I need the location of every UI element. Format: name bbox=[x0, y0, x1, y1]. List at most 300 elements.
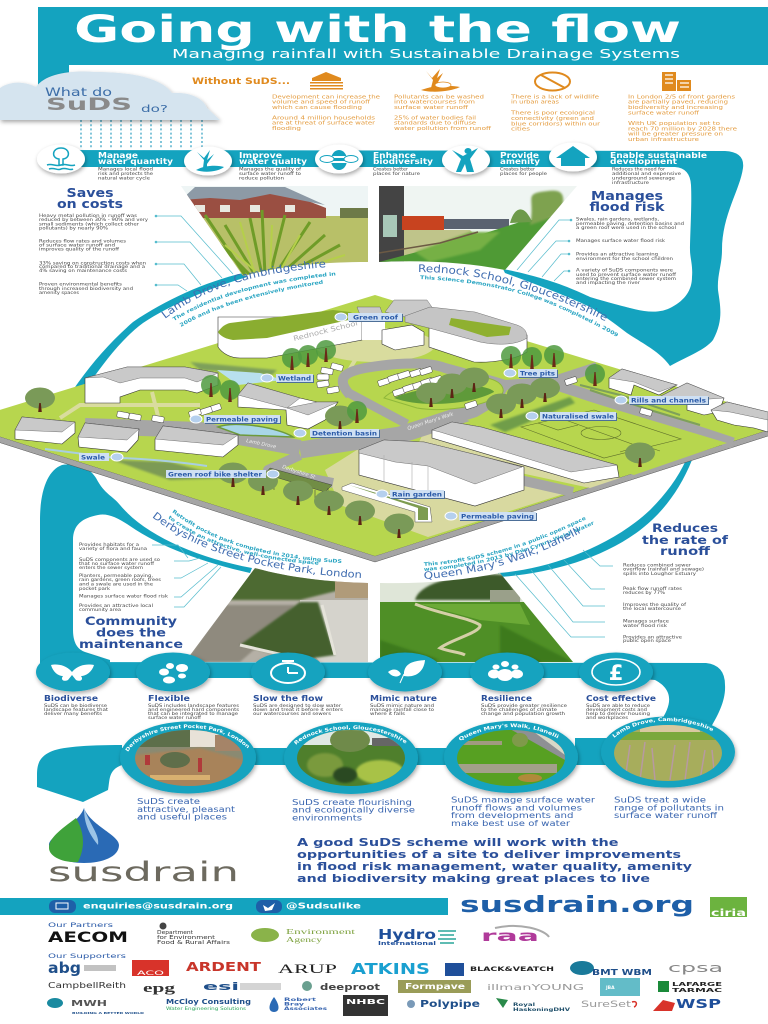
principle descriptions: SuDS mimic nature and bbox=[370, 703, 434, 709]
cloud: what do SuDS do: do? bbox=[141, 104, 168, 115]
caption 4 bbox=[614, 796, 724, 820]
orange column 3: There is poor ecological bbox=[510, 111, 595, 117]
orange column 3 bbox=[510, 94, 601, 132]
supporters row 2: esi bbox=[203, 980, 239, 993]
callout lines right top bbox=[517, 219, 572, 281]
trees bbox=[25, 340, 655, 538]
principle descriptions bbox=[44, 703, 650, 721]
principle descriptions: to the challenges of climate bbox=[481, 707, 557, 713]
closing statement bbox=[297, 837, 692, 885]
caption 4: SuDS treat a wide bbox=[614, 796, 706, 805]
ciria logo bbox=[710, 897, 747, 919]
arc title: Derbyshire Street: to create an attractive, well-connected space bbox=[168, 516, 318, 565]
principle descriptions: that can be integrated to manage bbox=[148, 711, 238, 717]
benefit labels: development bbox=[610, 157, 677, 166]
orange column 3: There is a lack of wildlife bbox=[510, 94, 599, 100]
benefit descriptions: reduce pollution bbox=[239, 176, 284, 182]
arc title: Lamb Drove: 2006 and has been extensively monitored bbox=[180, 280, 323, 327]
list: runoff: reduces by 77% bbox=[623, 590, 665, 596]
benefit descriptions: Creates better bbox=[500, 166, 535, 172]
site lawn bbox=[0, 295, 768, 556]
partners: Hydro bbox=[378, 928, 436, 943]
list: saves on costs: reduced by between 30% - 90% and very bbox=[39, 217, 148, 223]
list: saves on costs bbox=[39, 213, 148, 296]
supporters row 3: SureSet bbox=[581, 1000, 632, 1010]
list: community: that no surface water runoff bbox=[79, 561, 155, 567]
principle icon: droplets bbox=[136, 652, 210, 692]
road names: Lamb Drove bbox=[246, 438, 277, 450]
principle descriptions: SuDS can be biodiverse bbox=[44, 703, 107, 709]
caption 3: SuDS manage surface water bbox=[451, 796, 596, 805]
partners bbox=[48, 921, 549, 947]
orange column 3: in urban areas bbox=[511, 100, 559, 106]
photo: Derbyshire Street bbox=[185, 568, 368, 663]
principle icon: stopwatch bbox=[251, 652, 325, 692]
arc title: Queen Marys Walk: This retrofit SuDS scheme in a public open space bbox=[424, 517, 586, 566]
Rednock School right wing bbox=[405, 307, 527, 362]
list: community bbox=[79, 542, 169, 613]
list: saves on costs: Heavy metal pollution in runoff was bbox=[39, 213, 138, 219]
principle icon: leaf bbox=[368, 652, 442, 692]
circle photo: Derbyshire Street bbox=[118, 721, 260, 798]
susdrain logo drop and leaf bbox=[49, 808, 119, 863]
car park cars bbox=[117, 363, 653, 423]
rain garden planter bbox=[342, 483, 432, 522]
closing statement: in flood risk management, water quality, amenity bbox=[297, 861, 692, 873]
heading: reduces the rate of runoff: Reduces bbox=[652, 521, 718, 535]
lower teal band with arrow bbox=[37, 738, 620, 802]
list: community: community area bbox=[79, 607, 121, 613]
orange column 1: are at threat of surface water bbox=[272, 121, 376, 127]
principle descriptions: deliver many benefits bbox=[44, 711, 103, 717]
list: manages flood risk: and impacting the river bbox=[576, 280, 640, 286]
list: saves on costs: through increased biodiversity and bbox=[39, 286, 133, 292]
list: community: Planters, permeable paving, bbox=[79, 573, 153, 579]
caption 4: range of pollutants in bbox=[614, 803, 724, 812]
label: rain garden: Rain garden bbox=[392, 492, 442, 498]
caption 3: make best use of water bbox=[451, 819, 571, 828]
list: manages flood risk: Swales, rain gardens, wetlands, bbox=[576, 217, 659, 223]
icon: buildings bbox=[662, 72, 691, 91]
site base slab bbox=[0, 422, 768, 562]
callout lines bottom left bbox=[152, 545, 221, 607]
list: saves on costs: 4% saving on maintenance costs bbox=[39, 268, 128, 274]
list: runoff: overflow (rainfall and sewage) bbox=[623, 567, 704, 573]
list: runoff: water flood risk bbox=[623, 623, 668, 629]
label: green roof bike shelter: Green roof bike shelter bbox=[168, 472, 262, 478]
partners: for Environment bbox=[157, 935, 215, 941]
principle descriptions: manage rainfall close to bbox=[370, 707, 434, 713]
label: wetland bbox=[261, 374, 314, 383]
list: saves on costs: of surface water runoff and bbox=[39, 242, 115, 248]
paved plaza bbox=[325, 448, 570, 537]
icon: dead tree and fish bbox=[421, 69, 460, 92]
middle teal band with right tail bbox=[40, 662, 725, 727]
terrace forecourt bbox=[415, 430, 620, 488]
label: detention basin bbox=[294, 429, 380, 438]
cloud: what do SuDS do: SuDS bbox=[46, 95, 132, 115]
ciria logo: ciria bbox=[711, 908, 746, 919]
road network bbox=[85, 364, 733, 492]
caption 1: and useful places bbox=[137, 812, 227, 822]
supporters row 3: HaskoningDHV bbox=[513, 1007, 571, 1013]
supporters row 2: Formpave bbox=[405, 982, 465, 991]
principle descriptions: SuDS are designed to slow water bbox=[253, 703, 341, 709]
label: permeable paving lower bbox=[445, 512, 537, 521]
isometric site map bbox=[0, 295, 768, 562]
principle descriptions: SuDS provide greater resilience bbox=[481, 703, 567, 709]
list: saves on costs: small sediments (which collect other bbox=[39, 222, 139, 228]
circle photo: Derbyshire Street: Derbyshire Street Pocket Park, London bbox=[125, 724, 249, 752]
heading: community does the maintenance: does the bbox=[96, 626, 166, 640]
supporters row 2: epg bbox=[143, 980, 176, 995]
principle titles: Cost effective bbox=[586, 694, 657, 703]
principle icon: people bbox=[470, 652, 544, 692]
circle photo: Rednock School bbox=[282, 722, 422, 798]
supporters row 1: ACO bbox=[137, 970, 165, 977]
beige footpaths bbox=[60, 352, 360, 418]
label: rills and channels: Rills and channels bbox=[631, 398, 707, 404]
orange column 4: With UK population set to bbox=[628, 121, 720, 127]
partners: Department bbox=[157, 930, 193, 936]
supporters row 2: deeproot bbox=[320, 983, 381, 993]
heading: reduces the rate of runoff bbox=[642, 521, 729, 558]
orange column 4: will be greater pressure on bbox=[628, 132, 723, 138]
list: community: Manages surface water flood risk bbox=[79, 594, 169, 600]
benefit icon: provide amenity bbox=[442, 146, 490, 174]
callout lines bottom right bbox=[515, 550, 613, 637]
label: green roof bbox=[335, 313, 403, 322]
orange column 4 bbox=[628, 94, 737, 143]
large central block bbox=[359, 440, 524, 506]
label: permeable paving lower: Permeable paving bbox=[461, 514, 534, 520]
benefit labels bbox=[98, 151, 708, 166]
principle titles: Resilience bbox=[481, 694, 533, 703]
heading: manages flood risk: flood risk bbox=[590, 200, 666, 214]
arc title: Derbyshire Street: Derbyshire Street Pocket Park, London bbox=[152, 512, 361, 578]
tree island bbox=[384, 378, 503, 409]
school name: Rednock School bbox=[293, 319, 359, 343]
caption 3: runoff flows and volumes bbox=[451, 803, 582, 812]
supporters row 2: TARMAC bbox=[672, 988, 722, 994]
list: saves on costs: amenity spaces bbox=[39, 290, 80, 296]
heading: reduces the rate of runoff: runoff bbox=[660, 544, 711, 558]
list: runoff: Improves the quality of bbox=[623, 602, 687, 608]
list: manages flood risk: entering the combined sewer system bbox=[576, 276, 676, 282]
partners: Food & Rural Affairs bbox=[157, 940, 231, 946]
long block upper left bbox=[85, 367, 218, 403]
Rednock School left wing bbox=[218, 310, 362, 358]
principle descriptions: development costs and bbox=[586, 707, 647, 713]
list: runoff: Provides an attractive bbox=[623, 634, 682, 640]
caption 1: SuDS create bbox=[137, 797, 200, 806]
list: community: rain gardens, green roofs, trees bbox=[79, 577, 162, 583]
benefit descriptions: surface water runoff to bbox=[239, 171, 301, 177]
heading: saves on costs bbox=[57, 186, 123, 211]
label: wetland: Wetland bbox=[278, 376, 311, 382]
orange column 4: reach 70 million by 2028 there bbox=[628, 126, 737, 132]
partners: Our Partners bbox=[48, 921, 114, 929]
supporters row 1: ATKINS bbox=[351, 960, 430, 978]
list: community: Provides an attractive local bbox=[79, 603, 153, 609]
orange column 2: standards due to diffuse bbox=[394, 121, 476, 127]
supporters row 1 bbox=[48, 952, 723, 978]
label: green roof bike shelter bbox=[166, 470, 279, 478]
circle photo: Lamb Drove bbox=[600, 716, 738, 792]
principle titles: Flexible bbox=[148, 694, 191, 703]
partners: AECOM bbox=[48, 930, 128, 946]
heading: saves on costs: Saves bbox=[66, 186, 114, 200]
benefit descriptions: risk and protects the bbox=[98, 171, 153, 177]
supporters row 1: Our Supporters bbox=[48, 952, 127, 960]
benefit labels: water quantity bbox=[98, 157, 174, 166]
principle titles bbox=[44, 694, 657, 703]
orange column 4: urban infrastructure bbox=[628, 137, 699, 143]
benefit labels: water quality bbox=[239, 157, 308, 166]
principle descriptions: down and treat it before it enters bbox=[253, 707, 344, 713]
supporters row 3: MWH bbox=[71, 999, 107, 1008]
website: susdrain.org bbox=[460, 893, 694, 918]
list: runoff: Peak flow runoff rates bbox=[623, 586, 683, 592]
detention basin bbox=[218, 424, 293, 437]
supporters row 2: CampbellReith bbox=[48, 981, 126, 990]
principle icon: pound: £ bbox=[609, 661, 623, 685]
arc title: Derbyshire Street: Retrofit pocket park completed in 2014, using SuDS bbox=[172, 509, 342, 563]
orange column 4: are partially paved, reducing bbox=[628, 100, 728, 106]
caption 2 bbox=[292, 798, 415, 823]
list: manages flood risk: permeable paving, detention basins and bbox=[576, 221, 684, 227]
icon: no wildlife bbox=[535, 72, 570, 90]
orange column 3: connectivity (green and bbox=[511, 116, 594, 122]
closing statement: opportunities of a site to deliver improvements bbox=[297, 849, 681, 861]
benefit descriptions: natural water cycle bbox=[98, 176, 150, 182]
rills bbox=[580, 385, 700, 425]
supporters row 1: BMT WBM bbox=[592, 968, 652, 977]
caption 2: environments bbox=[292, 814, 362, 823]
bottom right arc bbox=[498, 460, 692, 577]
road names: Derbyshire St bbox=[281, 464, 317, 481]
list: community: pocket park bbox=[79, 586, 111, 592]
supporters row 1: abg bbox=[48, 959, 81, 977]
caption 4: surface water runoff bbox=[614, 811, 718, 820]
orange column 1: flooding bbox=[272, 126, 301, 132]
contact bar: enquiries@susdrain.org bbox=[83, 902, 233, 910]
label: permeable paving bbox=[190, 415, 281, 424]
orange column 2: Pollutants can be washed bbox=[394, 94, 484, 100]
supporters row 2: illmanYOUNG bbox=[487, 983, 584, 992]
supporters row 3: Associates bbox=[284, 1006, 328, 1012]
arc title: Queen Marys Walk: Queen Mary's Walk, Llanelli bbox=[424, 526, 580, 580]
list: saves on costs: 33% saving on construction costs when bbox=[39, 260, 146, 266]
orange column 2: water pollution from runoff bbox=[394, 126, 492, 132]
label: swale: Swale bbox=[81, 454, 105, 462]
list: saves on costs: pollutants) by nearly 90% bbox=[39, 226, 108, 232]
supporters row 3: McCloy Consulting bbox=[166, 998, 251, 1006]
principle descriptions: help to deliver housing bbox=[586, 711, 650, 717]
orange column 2: 25% of water bodies fail bbox=[394, 115, 476, 121]
arc title: Rednock School: Rednock School, Gloucestershire bbox=[419, 264, 607, 321]
orange column 1: Around 4 million households bbox=[272, 115, 375, 121]
cloud: what do SuDS do bbox=[0, 72, 220, 120]
principle descriptions: SuDS are able to reduce bbox=[586, 703, 650, 709]
football pitch bbox=[467, 392, 727, 475]
photo: Rednock School bbox=[379, 186, 577, 276]
principle descriptions: change and population growth bbox=[481, 711, 565, 717]
benefit labels: Provide bbox=[500, 151, 540, 160]
cloud: what do SuDS do: What do bbox=[45, 85, 112, 99]
list: runoff: the local watercourse bbox=[623, 606, 681, 612]
principle descriptions: landscape features that bbox=[44, 707, 108, 713]
supporters row 3: Robert bbox=[284, 997, 318, 1003]
list: saves on costs: improves quality of the runoff bbox=[39, 246, 120, 252]
benefit labels: Enable sustainable bbox=[610, 151, 708, 160]
orange column 4: In London 2/5 of front gardens bbox=[628, 94, 735, 100]
supporters row 3: NHBC bbox=[346, 998, 385, 1006]
benefit icon: sustainable development house bbox=[549, 142, 597, 172]
supporters row 2: LAFARGE bbox=[672, 982, 722, 988]
subtitle: Managing rainfall with Sustainable Drainage Systems bbox=[172, 46, 680, 61]
benefit descriptions: Manages the quality of bbox=[239, 166, 302, 172]
list: community: variety of flora and fauna bbox=[79, 546, 147, 552]
road names: Queen Mary's Walk bbox=[407, 411, 455, 432]
list: community: and a swale are used in the bbox=[79, 582, 153, 588]
benefit labels: amenity bbox=[500, 157, 541, 166]
list: runoff: Manages surface bbox=[623, 619, 669, 625]
list: manages flood risk: Manages surface water flood risk bbox=[576, 238, 666, 244]
road names bbox=[246, 411, 455, 481]
label: rain garden bbox=[376, 490, 445, 499]
list: manages flood risk: environment for the school children bbox=[576, 256, 673, 262]
label: swale bbox=[79, 453, 123, 462]
rain dashes bbox=[81, 120, 202, 148]
top left arc bbox=[73, 273, 247, 390]
contact bar bbox=[0, 898, 448, 915]
label: detention basin: Detention basin bbox=[312, 430, 377, 438]
principle titles: Biodiverse bbox=[44, 694, 99, 703]
Rednock School central blocks bbox=[357, 300, 436, 350]
contact bar: @Sudsulike bbox=[286, 902, 361, 910]
benefit descriptions: underground sewerage bbox=[612, 176, 675, 182]
principle descriptions: our watercourses and sewers bbox=[253, 711, 332, 717]
school courtyard bbox=[315, 328, 435, 362]
benefit descriptions: Reduces the need for bbox=[612, 166, 665, 172]
supporters row 3 bbox=[47, 995, 721, 1016]
caption 3 bbox=[451, 796, 596, 828]
heading: community does the maintenance bbox=[79, 614, 183, 651]
label: tree pits bbox=[504, 369, 558, 378]
orange column 2: into watercourses from bbox=[394, 100, 475, 106]
principle descriptions: surface water runoff bbox=[148, 715, 202, 721]
heading: reduces the rate of runoff: the rate of bbox=[642, 533, 729, 547]
caption 2: SuDS create flourishing bbox=[292, 798, 412, 807]
orange column 2: surface water runoff bbox=[394, 105, 469, 111]
swale bbox=[45, 449, 230, 480]
benefit descriptions: infrastructure bbox=[612, 180, 649, 186]
apartment block bbox=[238, 383, 338, 429]
benefit labels: Manage bbox=[98, 151, 139, 160]
supporters row 1: ARDENT bbox=[186, 960, 262, 974]
label: rills and channels bbox=[615, 396, 709, 405]
list: manages flood risk: used to prevent surface water runoff bbox=[576, 272, 677, 278]
principle titles: Slow the flow bbox=[253, 694, 324, 703]
benefit icon: improve water quality bbox=[184, 146, 232, 176]
wetland pond and reeds bbox=[190, 362, 283, 385]
orange column 3: blue corridors) within our bbox=[511, 121, 601, 127]
supporters row 1: ARUP bbox=[278, 961, 337, 976]
bottom left crescent bbox=[40, 464, 252, 668]
label: naturalised swale: Naturalised swale bbox=[542, 414, 614, 420]
caption 2: and ecologically diverse bbox=[292, 806, 415, 815]
caption 3: from developments and bbox=[451, 811, 574, 820]
list: manages flood risk: A variety of SuDS components were bbox=[576, 268, 673, 274]
supporters row 2 bbox=[48, 978, 722, 996]
orange column 1: which can cause flooding bbox=[272, 105, 362, 111]
list: manages flood risk bbox=[576, 217, 684, 286]
benefit descriptions: places for nature bbox=[373, 171, 420, 177]
list: manages flood risk: Provides an attractive learning bbox=[576, 252, 658, 258]
partners: International bbox=[378, 941, 436, 947]
label: naturalised swale bbox=[526, 412, 617, 421]
benefit descriptions: Creates better bbox=[373, 166, 408, 172]
orange column 1: Development can increase the bbox=[272, 94, 380, 100]
benefit labels: Improve bbox=[239, 151, 283, 160]
benefit descriptions bbox=[98, 166, 681, 186]
right terrace bbox=[432, 422, 619, 483]
teal swoosh top band and right tail bbox=[45, 150, 743, 366]
list: runoff: Reduces combined sewer bbox=[623, 563, 691, 569]
list: runoff: public open space bbox=[623, 638, 671, 644]
partners: raa bbox=[481, 927, 539, 945]
list: saves on costs: Reduces flow rates and volumes bbox=[39, 238, 127, 244]
principle descriptions: SuDS includes landscape features bbox=[148, 703, 240, 709]
caption 1: attractive, pleasant bbox=[137, 805, 235, 814]
list: manages flood risk: a green roof were used in the school bbox=[576, 225, 676, 231]
right houses bbox=[609, 369, 768, 432]
list: community: enters the sewer system bbox=[79, 565, 143, 571]
arc title: Rednock School: This Science Demonstrator College was completed in 2009 bbox=[420, 275, 618, 336]
principle descriptions: where it falls bbox=[370, 711, 406, 717]
list: community: SuDS components are used so bbox=[79, 557, 160, 563]
label: permeable paving: Permeable paving bbox=[206, 416, 278, 424]
icon: flooded house bbox=[310, 72, 343, 90]
closing statement: A good SuDS scheme will work with the bbox=[297, 837, 618, 849]
supporters row 1: cpsa bbox=[668, 961, 723, 975]
supporters row 3: Bray bbox=[284, 1002, 304, 1008]
without SuDS heading: Without SuDS... bbox=[192, 77, 290, 87]
photo: Lamb Drove bbox=[181, 186, 368, 276]
heading: saves on costs: on costs bbox=[57, 197, 123, 211]
callout lines left top bbox=[155, 215, 233, 291]
photo: Queen Marys Walk bbox=[380, 573, 573, 664]
circle photo: Queen Marys Walk bbox=[442, 720, 582, 798]
supporters row 1: BLACK&VEATCH bbox=[470, 965, 554, 973]
principle icon: pound bbox=[579, 652, 653, 692]
green roof bike shelter bbox=[265, 468, 332, 500]
principle titles: Mimic nature bbox=[370, 694, 438, 703]
principle descriptions: and engineered hard components bbox=[148, 707, 240, 713]
benefit descriptions: additional and expensive bbox=[612, 171, 681, 177]
supporters row 3: Water Engineering Solutions bbox=[166, 1006, 246, 1011]
benefit icon: enhance biodiversity bbox=[315, 144, 363, 174]
arc title: Lamb Drove: The residential development was completed in bbox=[172, 272, 336, 320]
circle photo: Queen Marys Walk: Queen Mary's Walk, Llanelli bbox=[459, 723, 559, 740]
principle icon: butterfly bbox=[36, 652, 110, 692]
benefit labels: biodiversity bbox=[373, 157, 434, 166]
list: runoff bbox=[623, 563, 704, 644]
principle descriptions: and workplaces bbox=[586, 715, 629, 721]
circle photo: Lamb Drove: Lamb Drove, Cambridgeshire bbox=[612, 717, 714, 738]
houses lamb drove bbox=[15, 417, 238, 457]
